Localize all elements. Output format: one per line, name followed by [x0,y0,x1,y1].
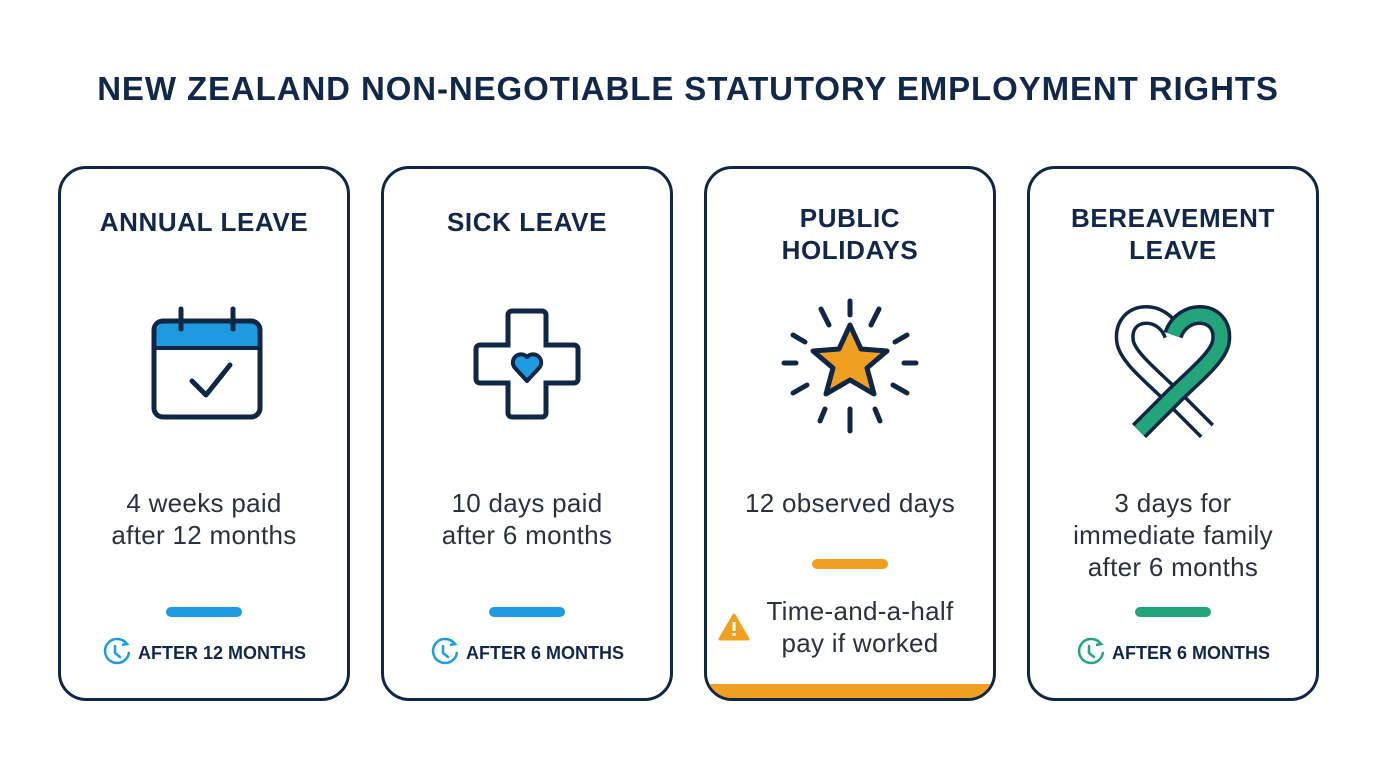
accent bar [812,559,888,569]
warning note: Time-and-a-half [766,596,954,626]
heading: SICK LEAVE [447,207,607,237]
label [432,638,624,664]
text: 3 days for [1114,488,1232,518]
label [104,638,306,664]
text [1073,488,1273,582]
text: 4 weeks paid [126,488,282,518]
accent bar [166,607,242,617]
text [111,488,297,550]
label: AFTER 12 MONTHS [138,643,306,663]
panel: annual leave [58,166,350,701]
heading: PUBLIC [800,203,900,233]
warning note [766,596,954,658]
heading: ANNUAL LEAVE [100,207,308,237]
text: 10 days paid [451,488,603,518]
text: 12 observed days [745,488,955,518]
label: AFTER 6 MONTHS [1112,643,1270,663]
title: NEW ZEALAND NON-NEGOTIABLE STATUTORY EMPLOYMENT RIGHTS [97,70,1279,107]
heading [782,203,918,265]
icon: calendar [152,306,262,420]
label [1078,638,1270,664]
icon: warning [718,613,750,640]
icon: medical cross heart [474,308,580,420]
warning note: pay if worked [781,628,939,658]
icon: star burst [782,298,918,434]
text: after 6 months [1088,552,1258,582]
panel: sick leave [381,166,673,701]
heading: BEREAVEMENT [1071,203,1275,233]
text: after 12 months [111,520,297,550]
bottom accent band [707,684,993,698]
label: AFTER 6 MONTHS [466,643,624,663]
accent bar [489,607,565,617]
icon: ribbon heart [1114,305,1232,438]
text [442,488,612,550]
heading [1071,203,1275,265]
heading: HOLIDAYS [782,235,918,265]
heading: LEAVE [1129,235,1217,265]
text: after 6 months [442,520,612,550]
text: immediate family [1073,520,1273,550]
accent bar [1135,607,1211,617]
panel: public holidays [704,166,996,701]
panel: bereavement leave [1027,166,1319,701]
